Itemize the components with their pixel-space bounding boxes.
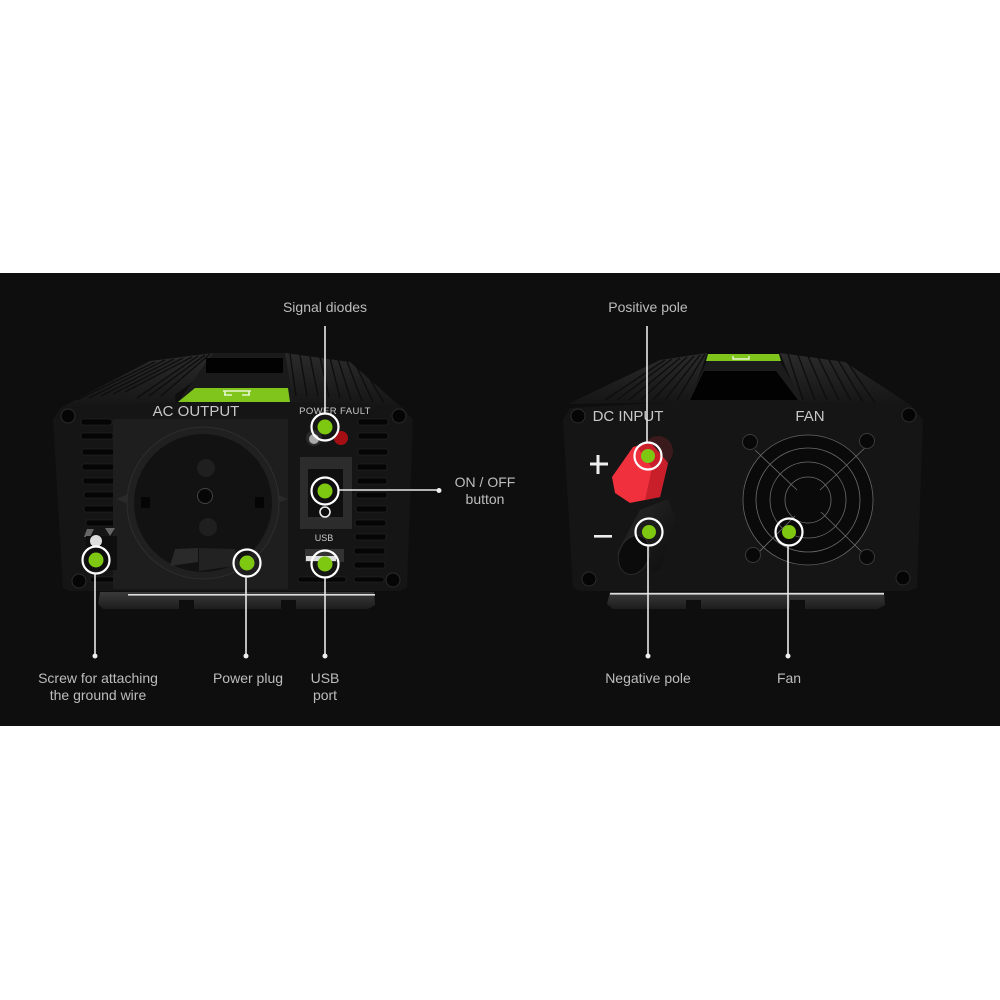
callout: negative pole: Negative pole [605,670,691,686]
left vents [81,419,118,582]
callout: ground screw: the ground wire [50,687,146,703]
green label [178,388,290,402]
minus sign [594,535,612,538]
mounting foot [607,592,885,609]
callout: on/off button: button [466,491,504,507]
inverter front panel [53,353,413,609]
USB port [305,549,344,562]
negative terminal [613,499,676,579]
callout: USB port [311,550,339,703]
toggle switch [306,430,322,446]
ground screw [84,528,117,570]
POWER FAULT label: POWER FAULT [299,406,371,417]
callout: positive pole: Positive pole [608,299,688,315]
background band [0,273,1000,726]
callout: USB port: USB [311,670,339,686]
right heatsink [780,353,912,406]
callout: negative pole [605,518,691,686]
device body [53,402,413,591]
top cover [688,361,803,402]
callout: ground screw: Screw for attaching [38,670,158,686]
AC OUTPUT label: AC OUTPUT [153,403,239,420]
left heatsink [568,353,707,404]
callout: signal diodes [283,299,367,440]
callout: positive pole [608,299,688,470]
right heatsink [285,353,402,408]
corner screws [571,408,916,586]
AC socket [113,419,288,589]
callout: power plug: Power plug [213,670,283,686]
callout: power plug [213,550,283,686]
DC INPUT label: DC INPUT [593,408,663,425]
callout: on/off button: ON / OFF [455,474,515,490]
callout: on/off button [312,474,515,507]
callout: signal diodes: Signal diodes [283,299,367,315]
fan grille [742,434,874,565]
device body [563,400,923,591]
plus sign [590,455,608,474]
inverter rear panel [563,353,923,609]
USB label: USB [315,533,333,543]
green label [706,354,781,361]
positive terminal [612,436,673,503]
callout: fan: Fan [777,670,801,686]
red fault diode [334,431,348,445]
right vents [298,419,388,582]
callout: ground screw [38,546,158,703]
rocker switch [300,457,352,529]
top cover [178,353,293,402]
corner screws [61,409,406,588]
callout: fan [776,518,802,686]
mounting foot [98,592,375,609]
FAN label: FAN [795,408,825,425]
display window [206,358,283,373]
left heatsink [60,353,213,408]
callout: USB port: port [313,687,337,703]
display window [690,371,798,400]
